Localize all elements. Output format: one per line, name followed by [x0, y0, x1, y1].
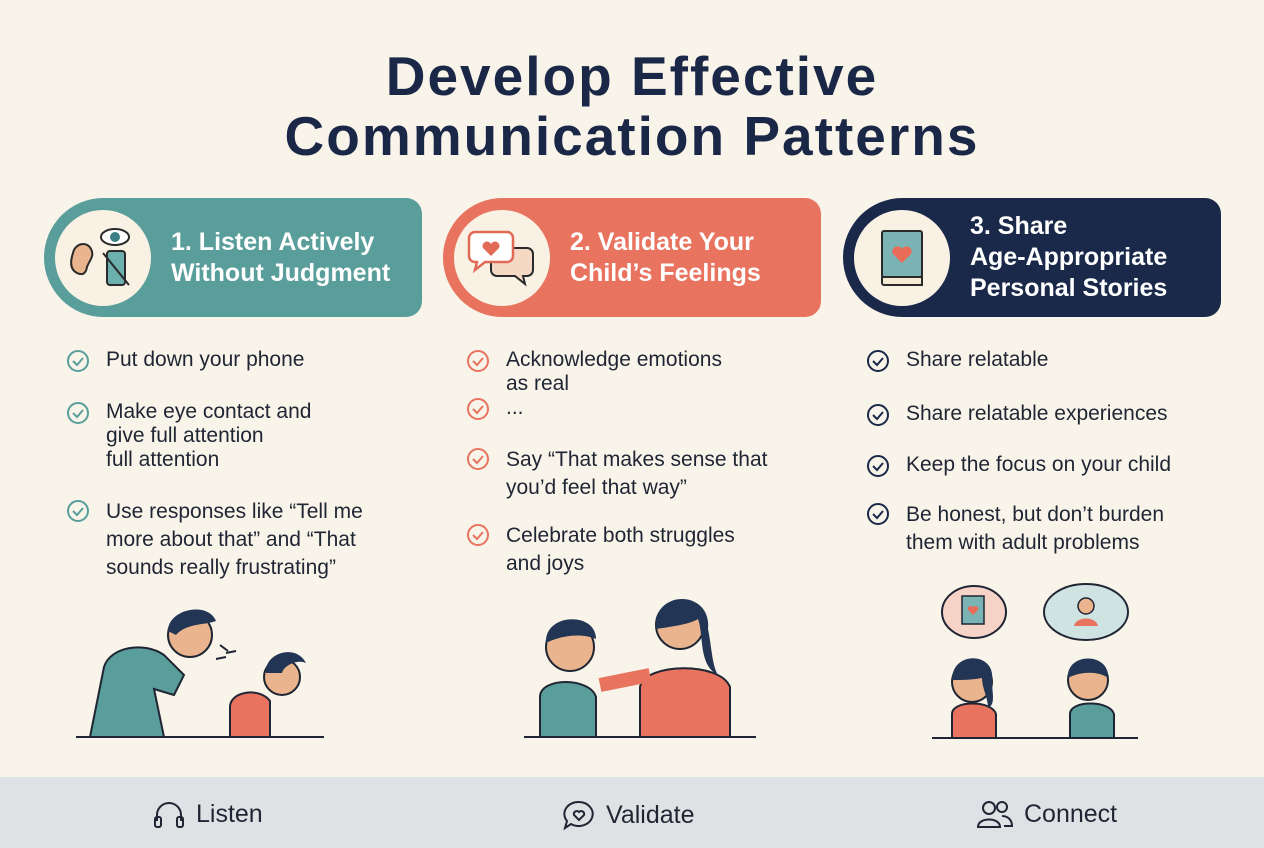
list: listen	[67, 348, 363, 579]
footer item: listen: Listen	[196, 800, 263, 828]
item: Share relatable	[906, 348, 1048, 371]
footer item: connect: Connect	[1024, 800, 1117, 828]
card: validate	[443, 198, 821, 317]
card: listen: Without Judgment	[171, 258, 390, 286]
card: validate: 2. Validate Your	[570, 228, 754, 256]
illustration: sharing stories	[932, 583, 1138, 739]
item: Make eye contact and	[106, 400, 311, 423]
item	[67, 400, 311, 471]
item: you’d feel that way”	[506, 476, 687, 499]
item: sounds really frustrating”	[106, 556, 336, 579]
item: Acknowledge emotions	[506, 348, 722, 371]
card: share	[843, 198, 1221, 317]
footer	[0, 777, 1264, 848]
card: share: Personal Stories	[970, 274, 1167, 302]
item	[67, 500, 363, 579]
footer item: listen	[154, 800, 263, 828]
item: Celebrate both struggles	[506, 524, 735, 547]
list: share	[867, 348, 1171, 554]
icon: book heart	[854, 210, 950, 306]
item: and joys	[506, 552, 584, 575]
item	[467, 524, 735, 575]
item	[867, 503, 1164, 554]
item	[467, 396, 524, 420]
footer item: validate	[563, 800, 694, 830]
item: Say “That makes sense that	[506, 448, 767, 471]
footer item: validate: Validate	[606, 800, 694, 828]
icon: ear eye phone	[55, 210, 151, 306]
title: Develop Effective	[386, 45, 878, 107]
item: Be honest, but don’t burden	[906, 503, 1164, 526]
card: listen	[44, 198, 422, 317]
list: validate	[467, 348, 768, 575]
item: Share relatable experiences	[906, 402, 1168, 425]
item: as real	[506, 372, 569, 395]
icon: speech bubbles heart	[454, 210, 550, 306]
illustration: parent listening	[76, 610, 324, 738]
item: Keep the focus on your child	[906, 453, 1171, 476]
card: validate: Child’s Feelings	[570, 258, 761, 286]
item: them with adult problems	[906, 531, 1139, 554]
item: ...	[506, 396, 524, 419]
item: Use responses like “Tell me	[106, 500, 363, 523]
item: more about that” and “That	[106, 528, 356, 551]
item	[467, 448, 768, 499]
item: Put down your phone	[106, 348, 304, 371]
item: give full attention	[106, 424, 264, 447]
item	[467, 348, 722, 395]
illustration: parent validating	[524, 599, 756, 738]
footer item: connect	[977, 800, 1117, 828]
title	[285, 45, 979, 167]
card: share: 3. Share	[970, 212, 1067, 240]
card: share: Age-Appropriate	[970, 243, 1167, 271]
item: full attention	[106, 448, 219, 471]
card: listen: 1. Listen Actively	[171, 228, 374, 256]
title: Communication Patterns	[285, 105, 979, 167]
